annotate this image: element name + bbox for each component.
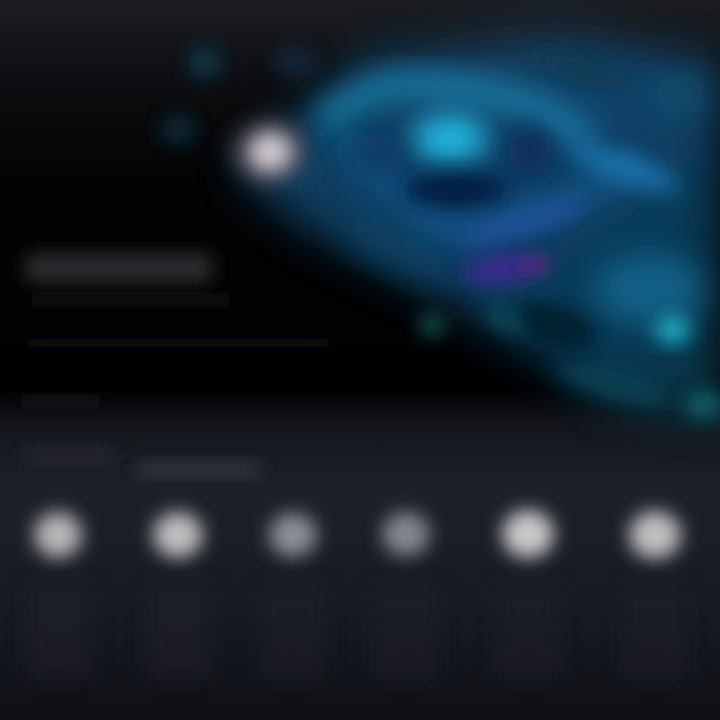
column 2 <box>146 512 212 680</box>
column 4 <box>373 512 439 680</box>
title placeholder: blurred heading <box>26 254 328 348</box>
column 6 <box>622 511 688 680</box>
illustration: isometric blue interface <box>161 35 720 420</box>
section heading <box>18 398 260 476</box>
column 3 <box>260 513 326 680</box>
icon: glowing white point <box>230 118 310 186</box>
column 5 <box>495 510 561 680</box>
column 1 <box>26 512 92 680</box>
